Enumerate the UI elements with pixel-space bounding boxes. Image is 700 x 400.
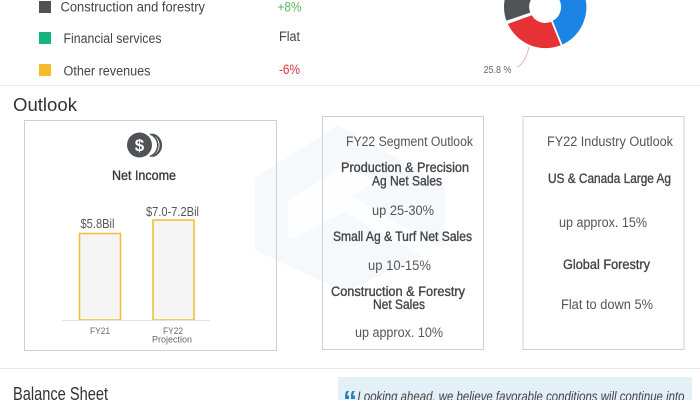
bar chart xyxy=(62,204,210,344)
panel: FY22 segment outlook: up 25-30% xyxy=(372,203,434,218)
watermark logo xyxy=(255,125,445,292)
row: other revenues: Other revenues xyxy=(64,64,151,78)
row: financial services xyxy=(39,29,300,46)
legend: revenue segments xyxy=(39,0,302,78)
bar: FY22 projection: Projection xyxy=(152,334,192,344)
row: other revenues: -6% xyxy=(279,62,300,77)
panel: net income xyxy=(24,120,276,350)
panel: FY22 segment outlook: Small Ag & Turf Net Sales xyxy=(333,229,472,244)
icon: dollar coins: $ xyxy=(135,136,145,155)
panel: FY22 industry outlook: FY22 Industry Outlook xyxy=(547,134,673,149)
panel: FY22 segment outlook: up 10-15% xyxy=(368,258,431,273)
panel: FY22 segment outlook: Construction & Forestry xyxy=(331,284,465,299)
donut chart xyxy=(484,0,587,76)
panel: FY22 industry outlook: Flat to down 5% xyxy=(561,297,653,312)
bar: FY21 xyxy=(80,216,120,336)
panel: FY22 segment outlook: Net Sales xyxy=(373,297,425,312)
panel: FY22 industry outlook: up approx. 15% xyxy=(559,215,647,230)
bar: FY22 projection xyxy=(146,204,199,344)
donut label: 25.8 % xyxy=(484,65,512,76)
panel: FY22 industry outlook: US & Canada Large Ag xyxy=(548,171,671,186)
bar: FY21: FY21 xyxy=(90,326,110,336)
panel: FY22 segment outlook xyxy=(322,116,484,350)
bar: FY22 projection: $7.0-7.2Bil xyxy=(146,204,199,219)
row: financial services: Flat xyxy=(279,29,300,44)
icon: dollar coins xyxy=(127,132,161,158)
panel: FY22 segment outlook: up approx. 10% xyxy=(355,325,443,340)
panel: FY22 segment outlook: Production & Precision xyxy=(341,160,469,175)
callout: quote xyxy=(338,377,692,400)
donut label leader xyxy=(517,47,529,67)
row: financial services: Financial services xyxy=(64,31,162,46)
panel: FY22 industry outlook xyxy=(523,116,684,350)
panel: FY22 industry outlook: Global Forestry xyxy=(563,257,650,272)
bar: FY22 projection: FY22 xyxy=(163,326,183,336)
row: other revenues xyxy=(39,62,300,78)
net income title: Net Income xyxy=(112,168,176,183)
heading: Outlook: Outlook xyxy=(13,95,78,115)
bar: FY21: $5.8Bil xyxy=(80,216,115,231)
panel: FY22 segment outlook: Ag Net Sales xyxy=(372,174,442,188)
panel: FY22 segment outlook: FY22 Segment Outlook xyxy=(346,134,473,149)
row: construction and forestry xyxy=(39,0,302,14)
